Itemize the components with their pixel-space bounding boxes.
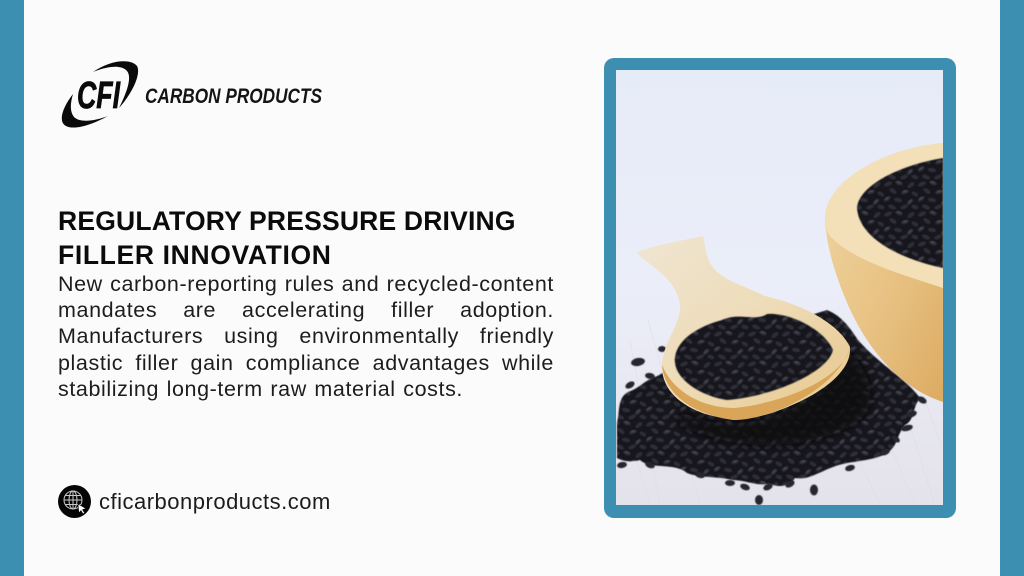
wooden bowl <box>825 143 943 402</box>
body text: mandates are accelerating filler adoption. <box>58 298 554 322</box>
body text: Manufacturers using environmentally friendly <box>58 324 554 348</box>
body text: stabilizing long-term raw material costs. <box>58 377 463 401</box>
logo: CFI Carbon Products <box>62 61 322 128</box>
photo panel: black seeds in wooden bowl and spoon <box>604 58 956 518</box>
heading <box>58 206 516 270</box>
loose seeds around pile <box>617 346 928 505</box>
website contact row <box>58 485 331 518</box>
body text: New carbon-reporting rules and recycled-content <box>58 272 554 296</box>
photo frame <box>604 58 956 518</box>
photo backdrop <box>616 70 943 505</box>
heading: FILLER INNOVATION <box>58 240 332 270</box>
seed pile <box>617 310 928 505</box>
left border band <box>0 0 24 576</box>
right border band <box>1000 0 1024 576</box>
icon: globe with cursor <box>58 485 91 518</box>
icon: CFI swoosh mark <box>62 61 138 128</box>
table wood grain <box>630 320 935 428</box>
icon: CFI swoosh mark: CFI <box>77 75 121 117</box>
wooden spoon <box>637 236 850 420</box>
website address: cficarbonproducts.com <box>99 489 331 514</box>
body text <box>58 272 554 401</box>
heading: REGULATORY PRESSURE DRIVING <box>58 206 516 236</box>
body text: plastic filler gain compliance advantages while <box>58 351 554 375</box>
